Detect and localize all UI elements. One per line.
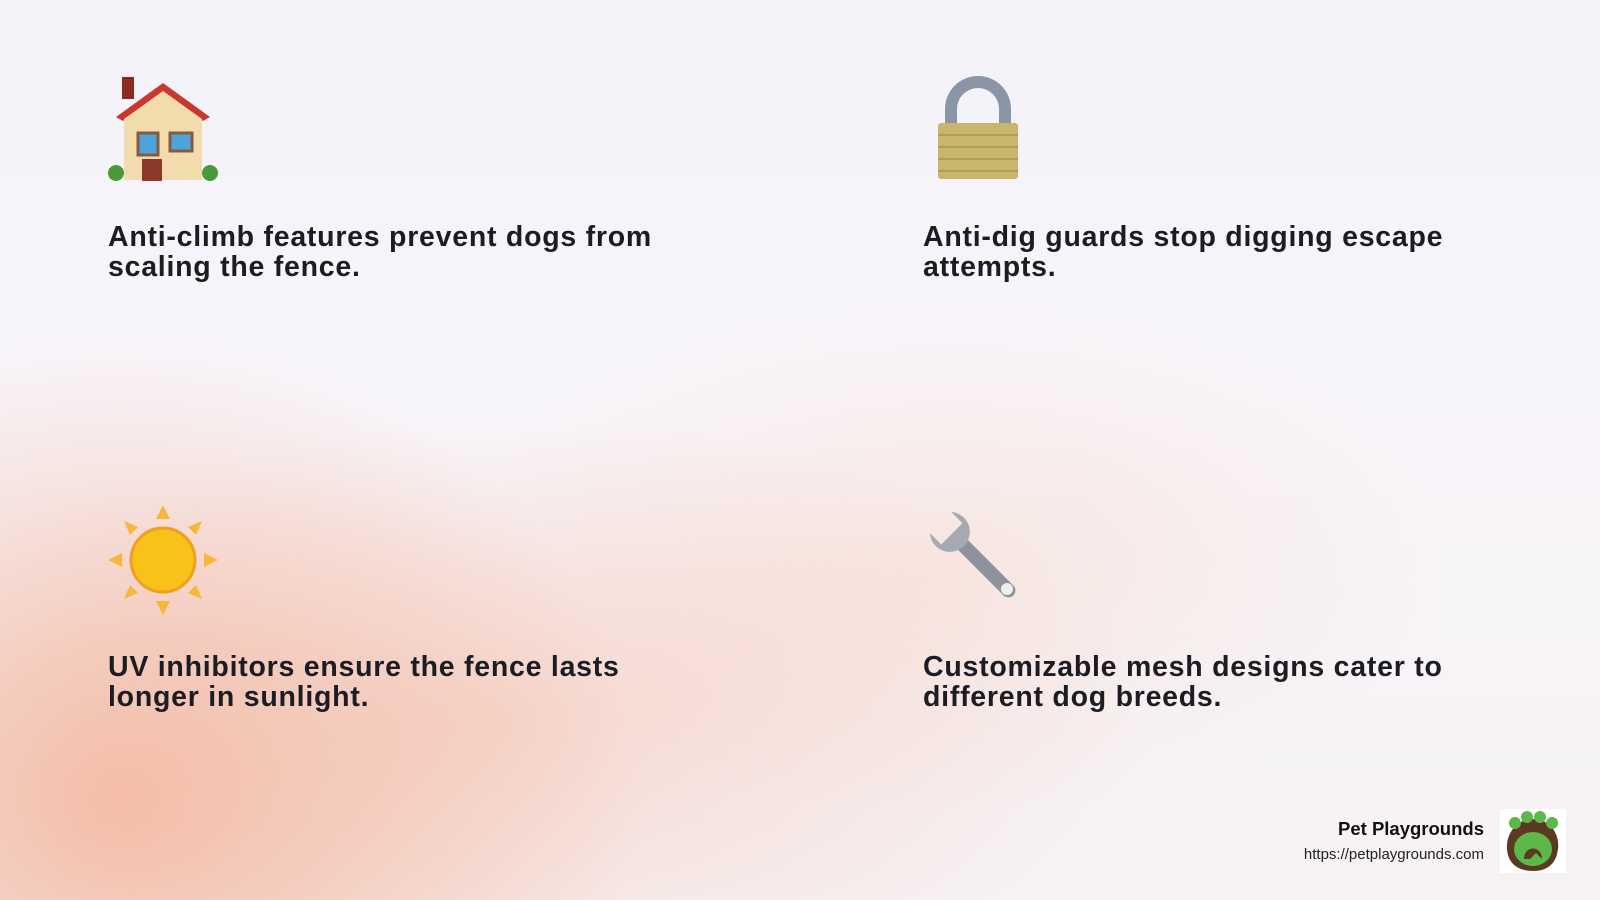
icon: wrench: [930, 512, 1016, 598]
text: scaling the fence.: [108, 251, 361, 283]
brand logo block: [1304, 809, 1566, 873]
icon: sun: [108, 505, 218, 615]
brand url: https://petplaygrounds.com: [1304, 846, 1484, 863]
text: [108, 221, 652, 283]
brand name: Pet Playgrounds: [1338, 818, 1484, 839]
panel: anti-dig: [923, 76, 1443, 283]
text: [923, 651, 1443, 713]
text: UV inhibitors ensure the fence lasts: [108, 651, 620, 683]
icon: paw: [1500, 809, 1566, 873]
text: attempts.: [923, 251, 1056, 283]
icon: padlock: [938, 76, 1018, 179]
text: Anti-dig guards stop digging escape: [923, 221, 1443, 253]
text: [108, 651, 620, 713]
panel: uv: [108, 505, 620, 713]
icon: house: [108, 77, 218, 181]
text: longer in sunlight.: [108, 681, 369, 713]
panel: mesh: [923, 512, 1443, 713]
panel: anti-climb: [108, 77, 652, 283]
text: Anti-climb features prevent dogs from: [108, 221, 652, 253]
text: different dog breeds.: [923, 681, 1222, 713]
text: [923, 221, 1443, 283]
text: Customizable mesh designs cater to: [923, 651, 1443, 683]
